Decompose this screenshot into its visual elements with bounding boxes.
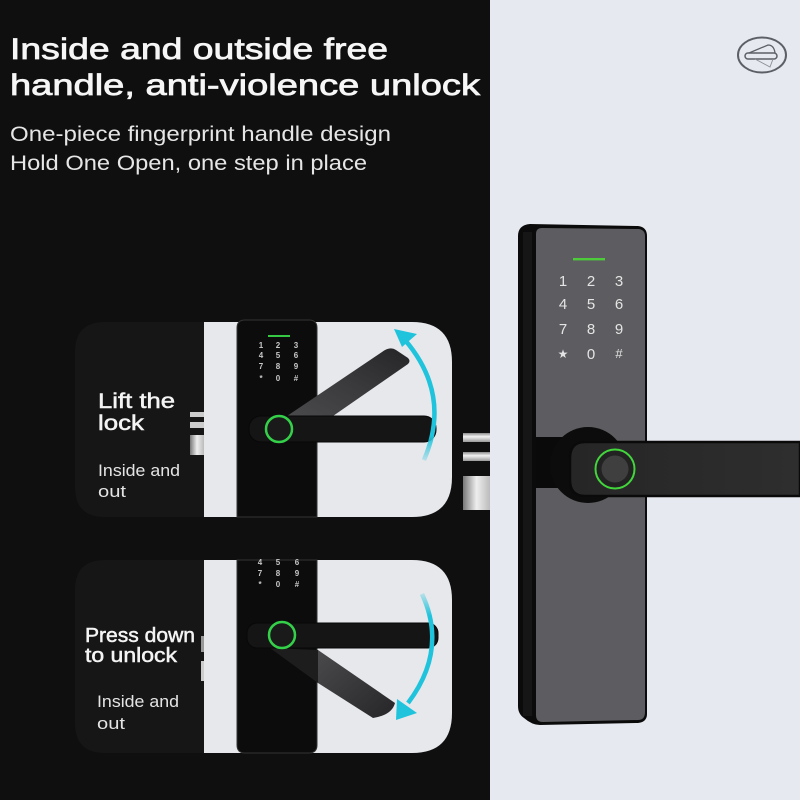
title [10,33,481,102]
label: inside and out: out [97,714,125,733]
keypad: 8 [276,362,281,371]
keypad: 9 [294,362,299,371]
keypad: 3 [294,341,299,350]
keypad: 4 [259,351,264,360]
panel: lift the lock [75,320,452,517]
fingerprint ring [266,416,292,442]
keypad: # [295,580,300,589]
handle [249,416,436,442]
keypad: 2 [276,341,281,350]
label: press down to unlock: Press down [85,625,195,647]
keypad: 7 [258,569,263,578]
handle [570,442,800,496]
latch: side bolts [463,433,490,510]
fingerprint ring [269,622,295,648]
panel: press down to unlock [75,558,452,753]
handle [247,623,438,648]
keypad [259,335,299,383]
keypad: 9 [615,321,623,338]
label: lift the lock [98,390,175,435]
fingerprint sensor [596,450,634,488]
label: inside and out [97,692,179,733]
label: press down to unlock [85,625,195,667]
label: inside and out: Inside and [97,692,179,711]
keypad: * [259,374,263,383]
main door lock [518,224,800,725]
keypad: 0 [276,374,281,383]
keypad: 7 [259,362,264,371]
keypad: 5 [276,351,281,360]
arrow: up [394,329,434,460]
label: inside and out: out [98,482,126,501]
keypad: 5 [587,296,595,313]
lock face [536,228,645,722]
keypad: 6 [295,558,300,567]
latch [190,412,204,455]
title: handle, anti-violence unlock [10,69,481,102]
lock body [518,224,647,725]
icon: handle logo [738,38,786,72]
keypad: 3 [615,273,623,290]
title: Inside and outside free [10,33,388,66]
keypad: 9 [295,569,300,578]
lock body [237,320,317,517]
side strip [523,232,532,716]
latch [201,636,204,681]
keypad: 4 [258,558,263,567]
keypad: 0 [276,580,281,589]
keypad: 0 [587,346,595,363]
keypad: 6 [294,351,299,360]
keypad [258,558,300,589]
label: lift the lock: Lift the [98,390,175,413]
arrow: down [396,594,432,720]
subtitle [10,123,391,175]
label: inside and out: Inside and [98,461,180,480]
keypad: ★ [558,347,568,361]
label: lift the lock: lock [98,412,145,435]
keypad: 4 [559,296,567,313]
subtitle: Hold One Open, one step in place [10,152,367,175]
keypad: 2 [587,273,595,290]
keypad: 7 [559,321,567,338]
lowered handle [270,648,395,718]
label: inside and out [98,461,180,501]
keypad: 8 [587,321,595,338]
lock body [237,560,317,753]
handle rosette [536,427,626,503]
keypad: 8 [276,569,281,578]
keypad: # [294,374,299,383]
label: press down to unlock: to unlock [85,645,178,667]
keypad: 1 [259,341,264,350]
raised handle [287,348,410,416]
subtitle: One-piece fingerprint handle design [10,123,391,146]
keypad: * [258,580,262,589]
keypad [558,273,623,363]
keypad: 1 [559,273,567,290]
keypad: 5 [276,558,281,567]
keypad: # [615,346,623,361]
keypad: 6 [615,296,623,313]
status light [573,258,605,260]
